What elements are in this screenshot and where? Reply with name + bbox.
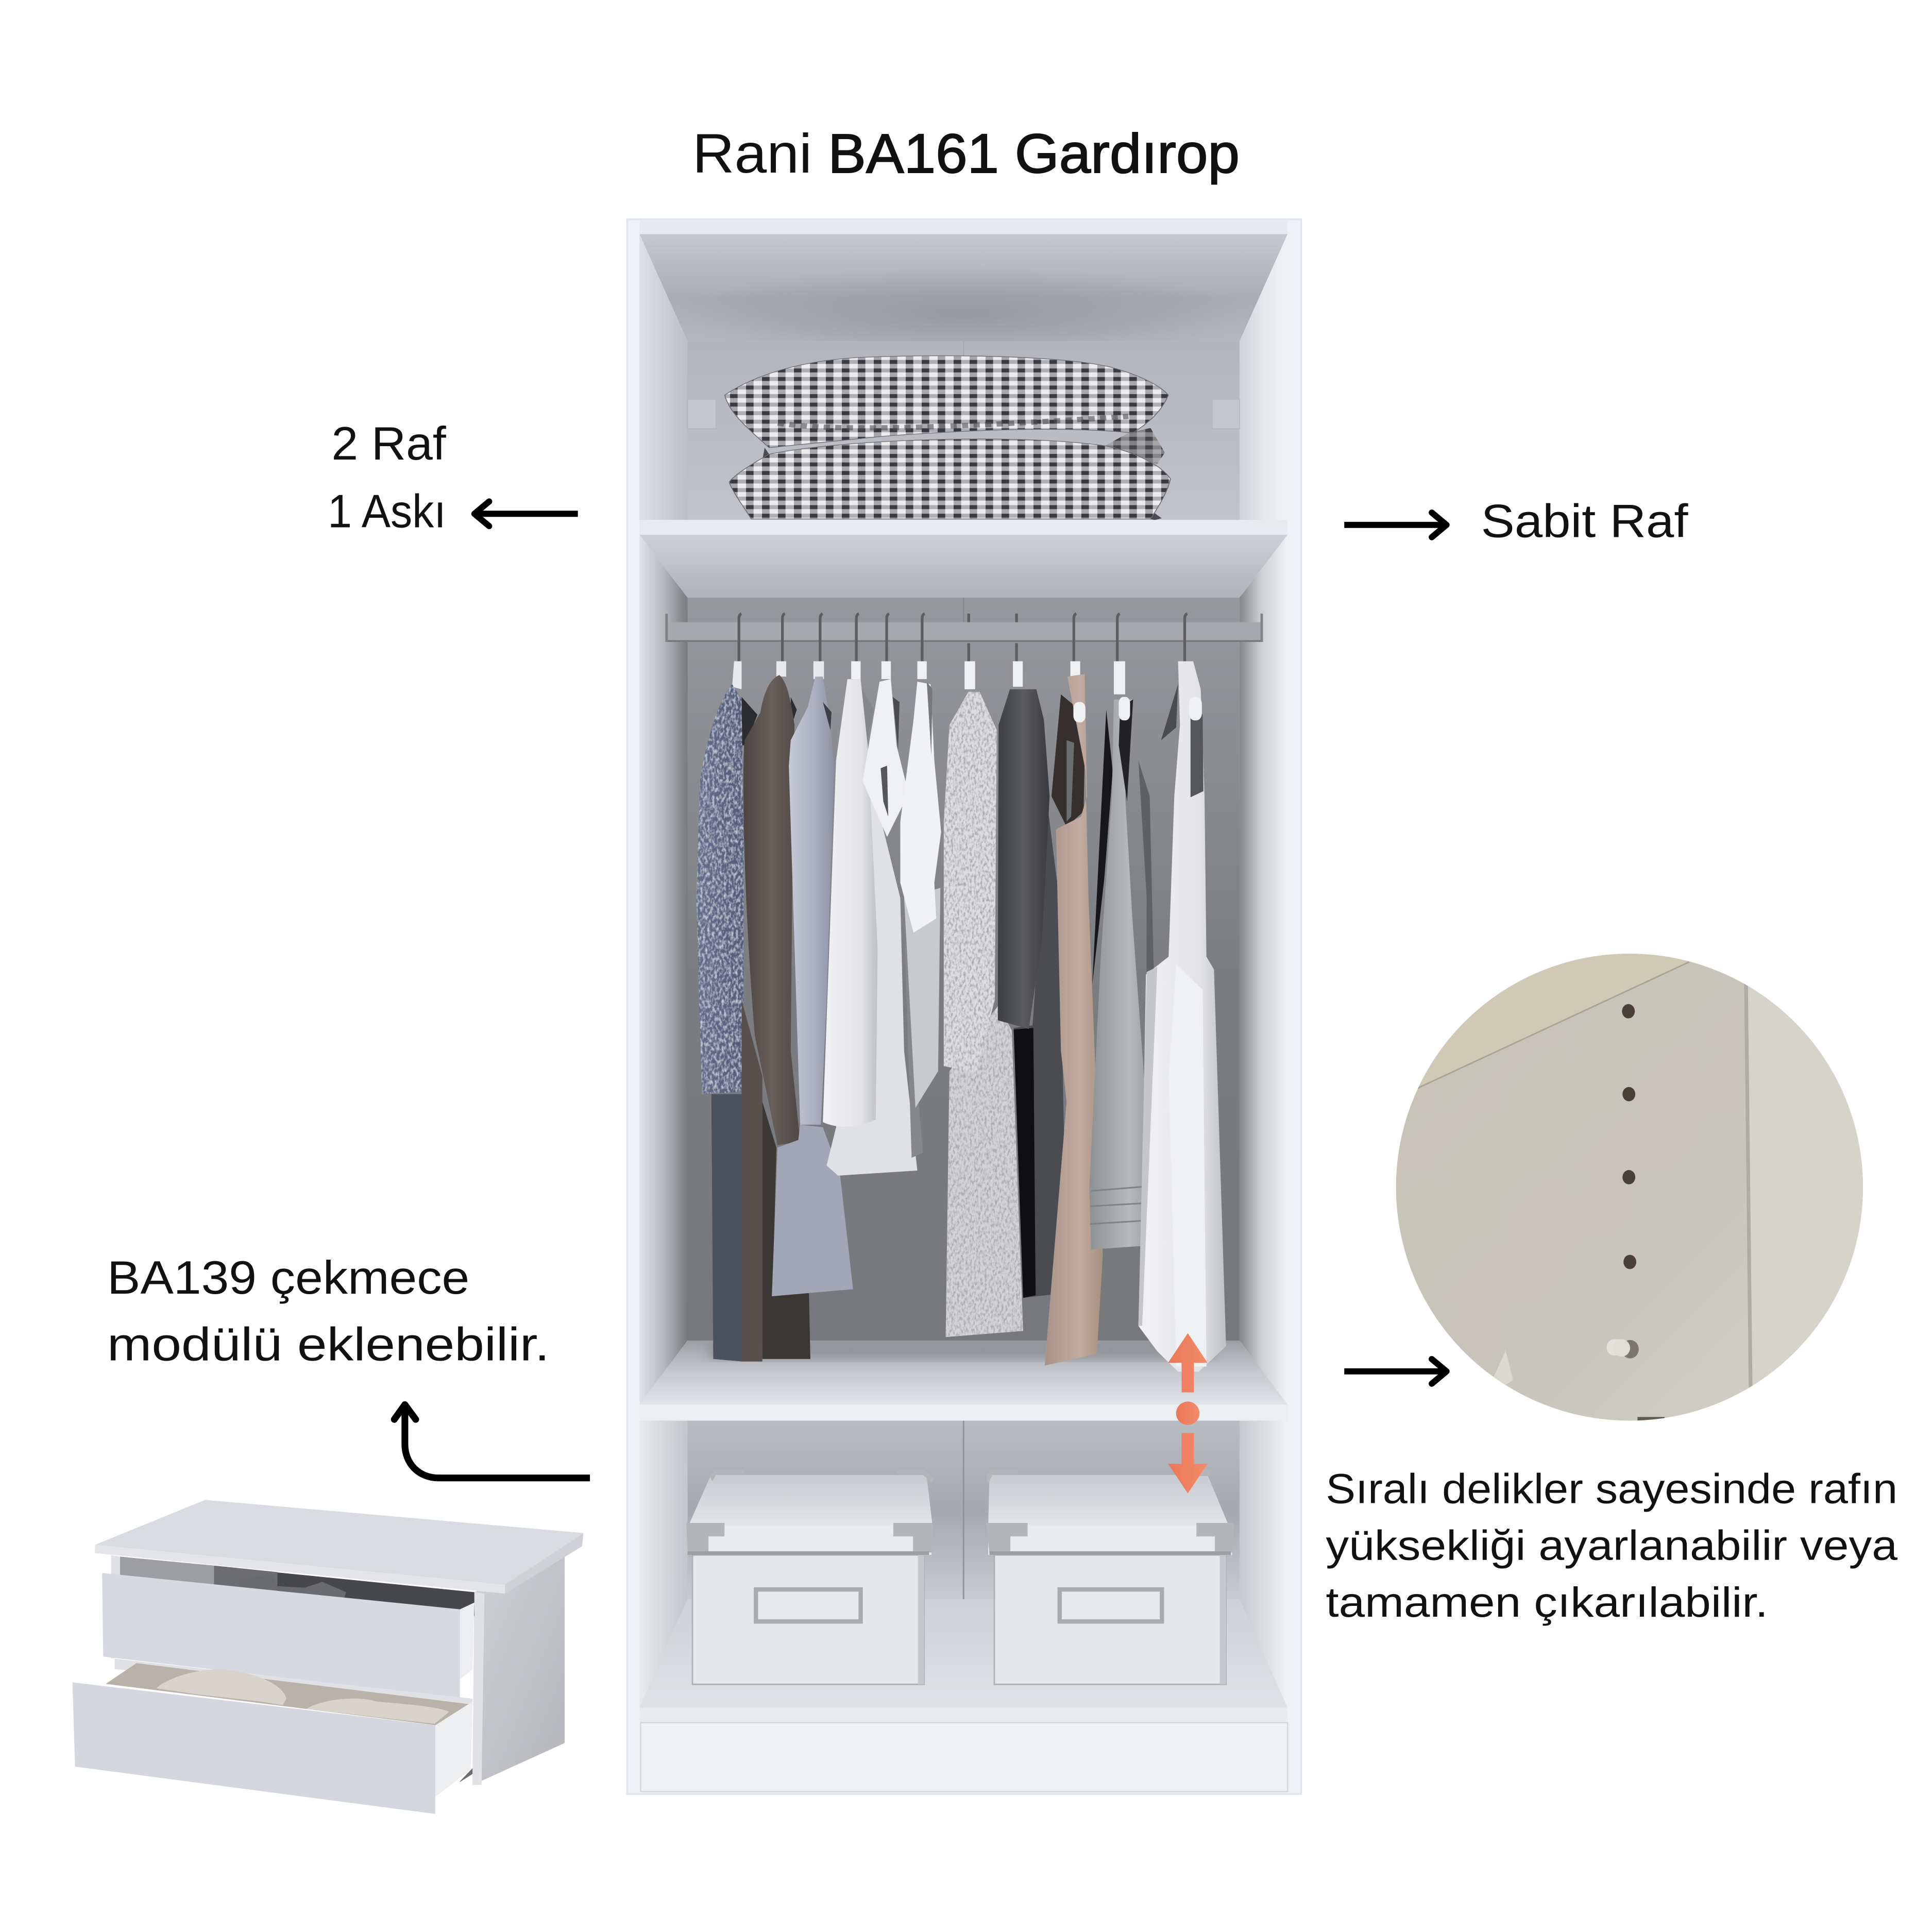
arrow: to photo [1344,1359,1447,1384]
top compartment [639,221,1287,520]
middle compartment [639,535,1287,1404]
hanging clothes [696,662,1226,1371]
hanging rail [665,614,1263,642]
dark grey dress [998,662,1067,1298]
paisley dress [944,662,1023,1337]
label: 2 raf 1 aski [328,418,447,538]
hangers [739,614,1187,665]
upper drawer [102,1573,474,1698]
arrow: to sabit raf [1344,513,1447,537]
wardrobe [627,219,1301,1794]
lavender dress [772,662,853,1296]
icon: adjustable height arrow [1168,1333,1208,1494]
wardrobe carcass [627,219,1301,1794]
label: drawer module: modülü eklenebilir. [107,1318,550,1370]
storage box left [686,1470,934,1684]
pillows [725,356,1171,520]
adjustable shelf [639,1341,1287,1420]
label: adjustable shelf description: yüksekliği ayarlanabilir veya [1326,1522,1898,1569]
label: 2 raf 1 aski: 2 Raf [331,418,447,470]
white shirt and skirt [823,662,923,1176]
top opening [111,1555,120,1659]
drawer module illustration [73,1500,584,1814]
storage box right [986,1470,1233,1684]
tabletop [95,1500,584,1594]
arrow: curved to drawer label [394,1404,590,1478]
label: drawer module: BA139 çekmece [107,1252,469,1304]
label: adjustable shelf description: tamamen çıkarılabilir. [1326,1579,1768,1626]
blush dress [1045,662,1103,1366]
title: BA161 Gardırop [828,123,1240,184]
photo: shelf pin holes [1396,954,1863,1421]
label: sabit raf: Sabit Raf [1481,496,1688,548]
title: Rani [692,123,812,184]
grey pleated dress [1089,662,1156,1249]
carcass side [472,1555,565,1785]
label: 2 raf 1 aski: 1 Askı [328,486,446,538]
label: adjustable shelf description [1326,1466,1898,1626]
brown jacket [741,662,810,1362]
white blouse [900,662,941,1108]
inner dark skirt [1139,760,1157,1153]
fixed shelf [639,520,1287,598]
lower drawer [73,1659,472,1814]
white dress [1139,662,1226,1371]
shelf pin brackets [688,399,1240,429]
arrow: to 2 raf 1 aski [474,501,578,526]
label: drawer module [107,1252,550,1370]
label: adjustable shelf description: Sıralı delikler sayesinde rafın [1326,1466,1897,1513]
lower compartment [639,1420,1287,1791]
navy coat [696,662,757,1362]
ruffled blouse [862,662,909,837]
